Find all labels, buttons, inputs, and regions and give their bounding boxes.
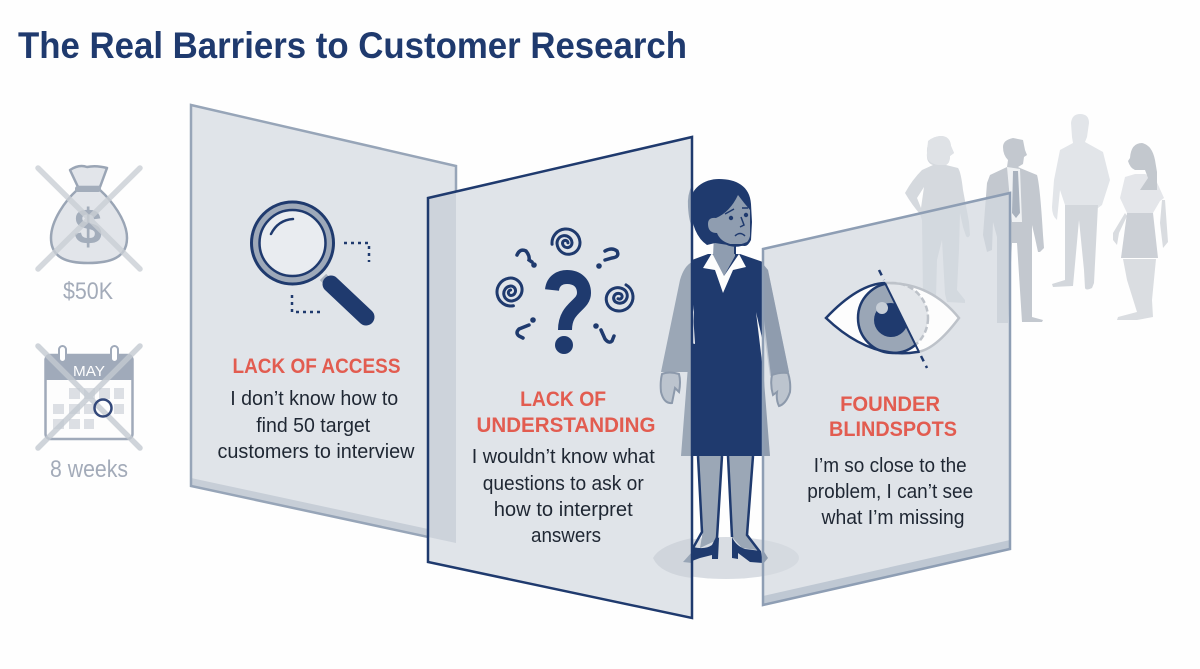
skirt flare bbox=[681, 368, 770, 456]
sleeves bbox=[661, 262, 692, 372]
text: founder blindspots quote: what I’m missing bbox=[821, 507, 964, 529]
text: founder blindspots quote: I’m so close to the bbox=[814, 455, 967, 477]
icon: crossed-out calendar bbox=[38, 346, 140, 448]
background group of faded people bbox=[905, 114, 1168, 323]
label: $50K: $50K bbox=[63, 278, 113, 305]
person: woman in jacket bbox=[905, 136, 970, 303]
text: lack of understanding quote: questions to ask or bbox=[483, 473, 644, 495]
collar bbox=[703, 253, 746, 293]
heading: lack of understanding: UNDERSTANDING bbox=[476, 414, 656, 437]
text: lack of access quote: find 50 target bbox=[256, 415, 371, 437]
icon: crossed-out money bag: $ bbox=[74, 199, 102, 255]
person: man in casual shirt bbox=[1052, 114, 1110, 290]
floor shadow bbox=[653, 537, 799, 579]
panel 1: lack of access bbox=[191, 105, 456, 543]
dress slits bbox=[691, 312, 762, 366]
text: lack of understanding quote: I wouldn’t know what bbox=[472, 446, 655, 468]
heading: founder blindspots: FOUNDER bbox=[840, 393, 940, 416]
text: lack of access quote: customers to interview bbox=[218, 441, 415, 463]
shoes bbox=[692, 537, 719, 561]
icon: question mark and spirals bbox=[495, 228, 638, 354]
figure overlap seen through panel bbox=[763, 264, 789, 456]
text: lack of understanding quote: how to interpret bbox=[494, 499, 633, 521]
text: lack of access quote: I don’t know how to bbox=[230, 388, 398, 410]
person: woman with skirt bbox=[1113, 143, 1168, 320]
text: founder blindspots quote: problem, I can’t see bbox=[807, 481, 973, 503]
hair bbox=[690, 179, 752, 246]
dress bbox=[691, 254, 763, 456]
icon: magnifying glass bbox=[252, 202, 369, 317]
title: The Real Barriers to Customer Research bbox=[18, 25, 687, 66]
panel 3: founder blindspots bbox=[763, 193, 1010, 605]
person: man in suit and tie bbox=[983, 138, 1044, 323]
standing woman figure bbox=[653, 179, 799, 579]
icon: crossed-out money bag bbox=[38, 166, 140, 269]
panel 2: lack of understanding bbox=[428, 137, 692, 618]
heading: founder blindspots: BLINDSPOTS bbox=[829, 418, 957, 441]
text: lack of understanding quote: answers bbox=[531, 525, 601, 547]
icon: half-hidden eye bbox=[826, 270, 959, 368]
face bbox=[708, 195, 750, 244]
neck bbox=[713, 235, 735, 276]
figure overlap seen through panel bbox=[661, 262, 692, 456]
icon: crossed-out calendar: MAY bbox=[73, 363, 105, 380]
heading: lack of understanding: LACK OF bbox=[520, 388, 606, 411]
heading: lack of access: LACK OF ACCESS bbox=[232, 355, 400, 378]
label: 8 weeks: 8 weeks bbox=[50, 456, 128, 483]
legs bbox=[698, 456, 722, 548]
